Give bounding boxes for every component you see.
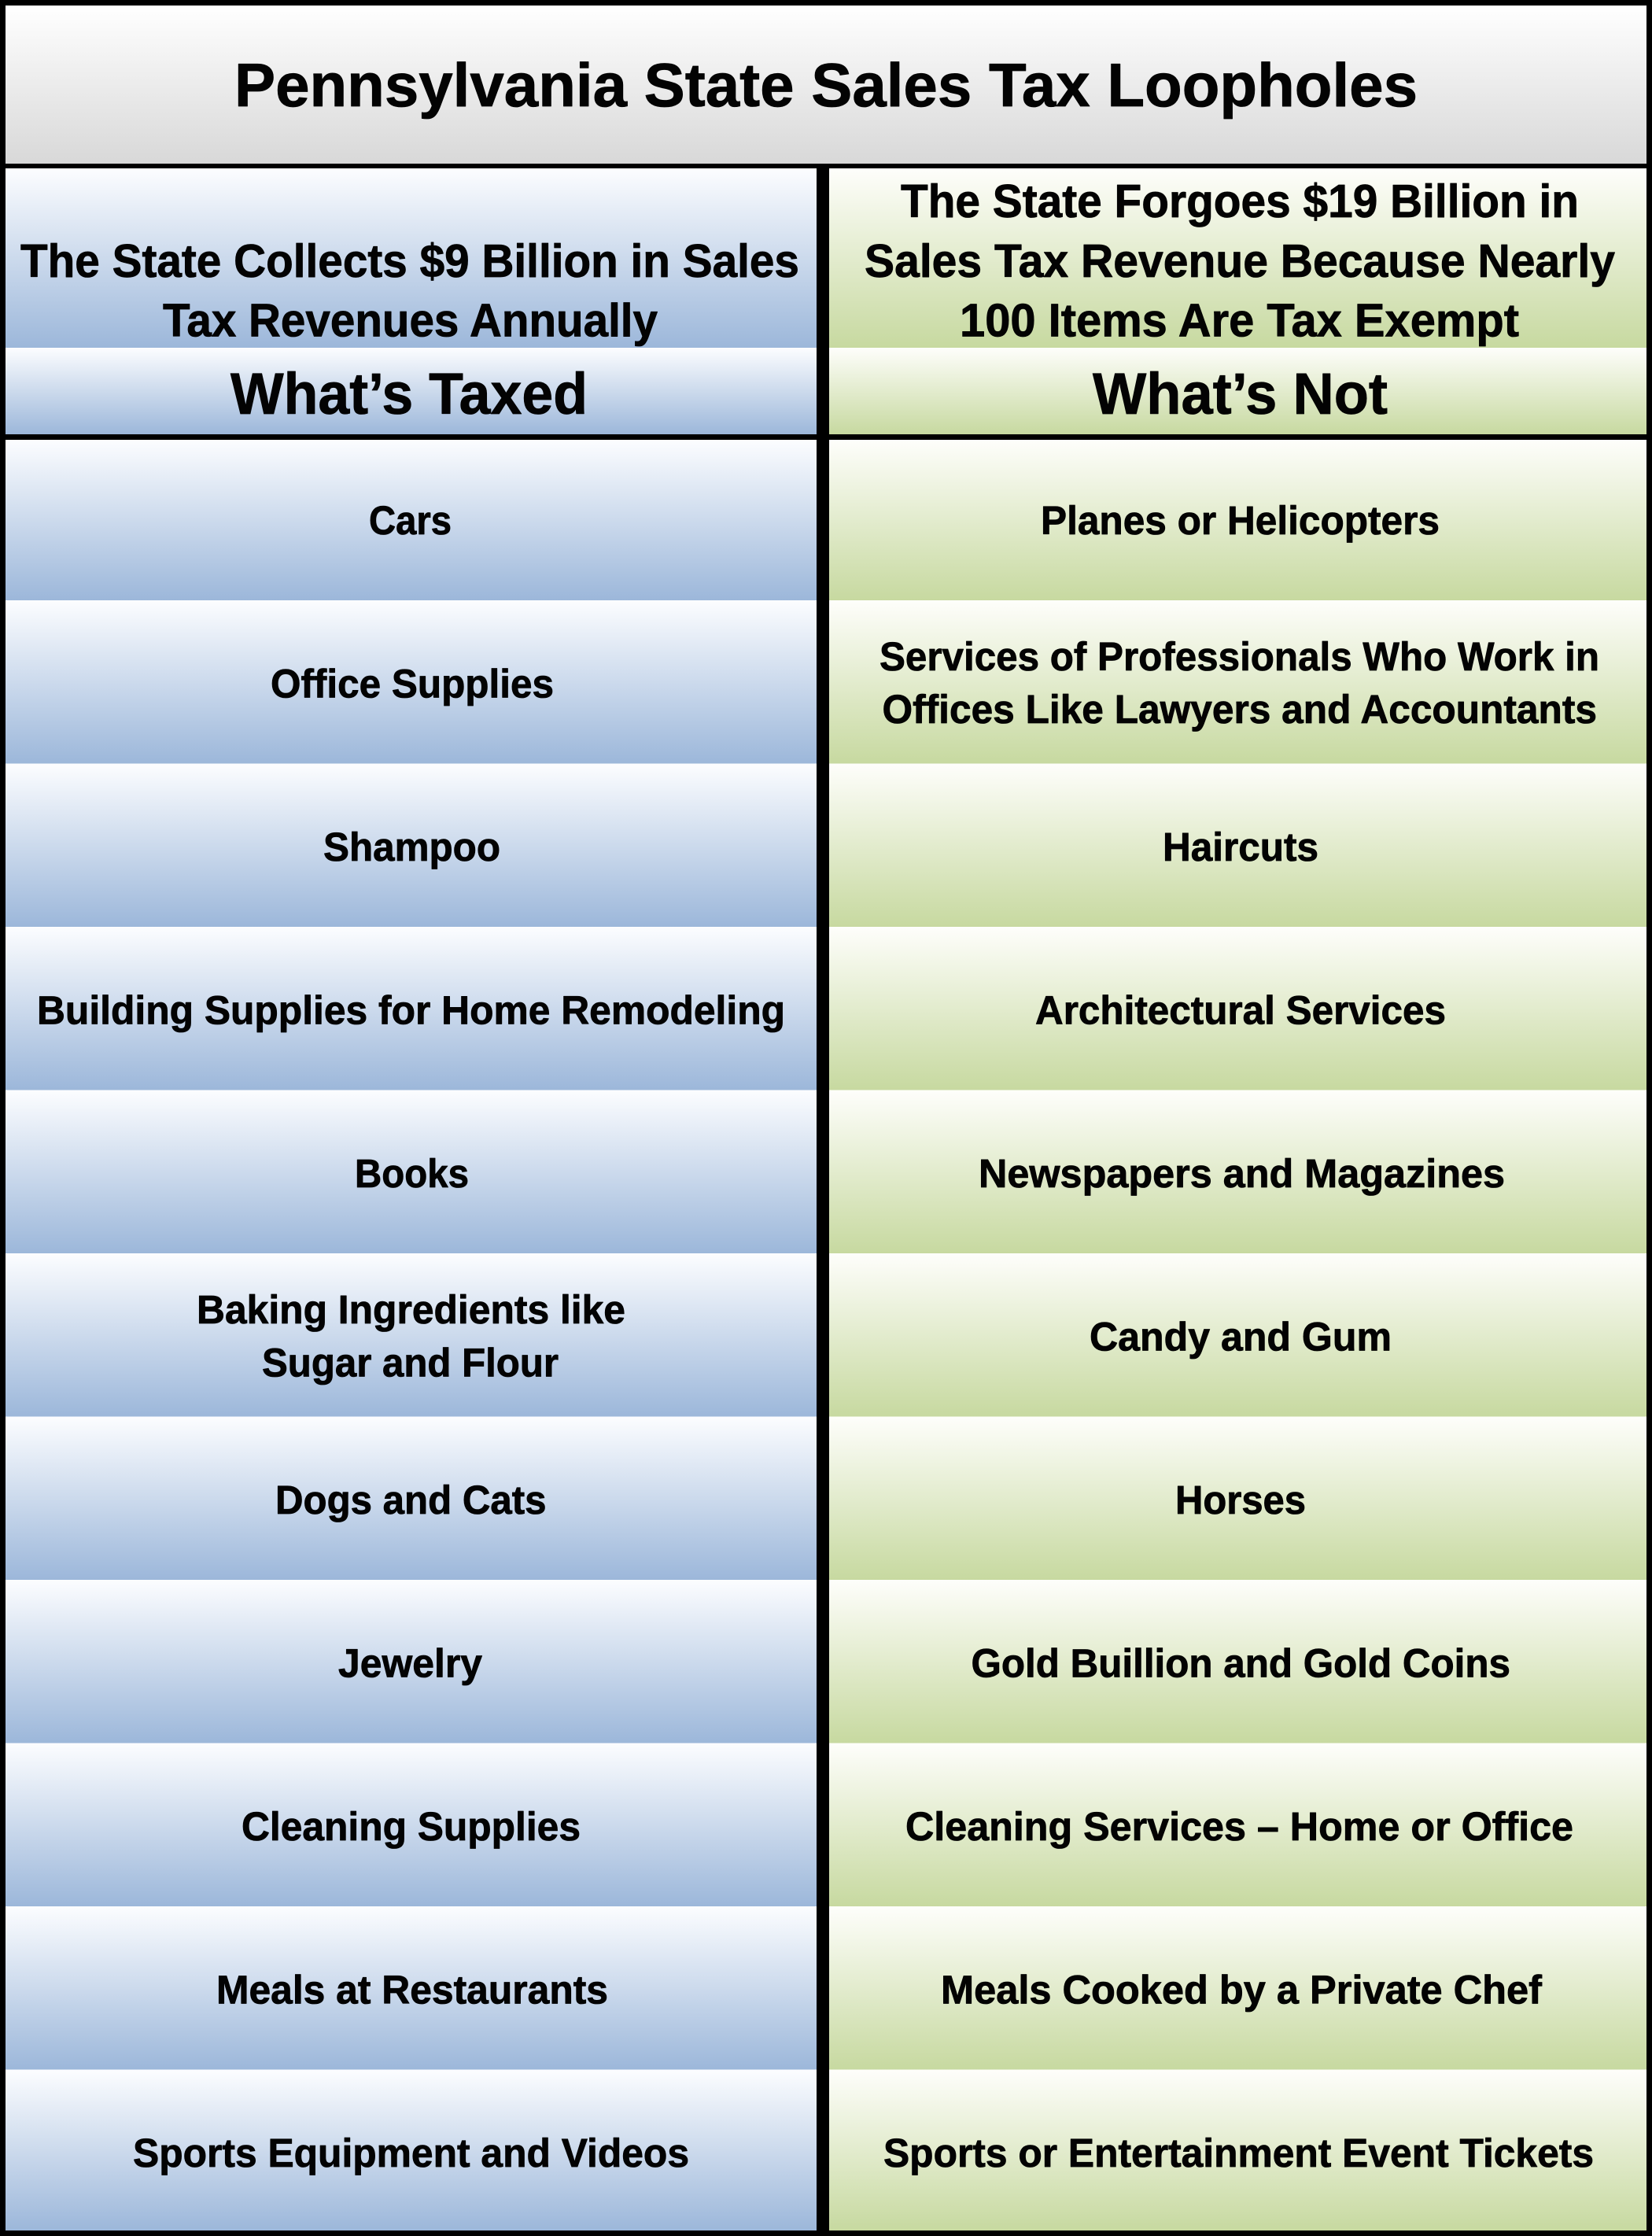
row 7 exempt: horses: Horses <box>1175 1478 1306 1522</box>
row 6 exempt: candy and gum: Candy and Gum <box>1090 1314 1392 1360</box>
row 4 taxed: building supplies <box>6 927 817 1090</box>
heading: what's taxed: What’s Taxed <box>230 361 588 426</box>
row 10 exempt: private chef <box>829 1906 1646 2069</box>
row 8 exempt: gold <box>829 1580 1646 1743</box>
title: Pennsylvania State Sales Tax Loopholes <box>234 50 1418 120</box>
row 7 exempt: horses <box>829 1416 1646 1580</box>
row 6 taxed: baking ingredients: Sugar and Flour <box>262 1341 559 1385</box>
row 3 taxed: shampoo <box>6 763 817 927</box>
row 4 taxed: building supplies: Building Supplies for Home Remodeling <box>37 988 785 1032</box>
panel: exempt summary <box>829 168 1646 348</box>
row 5 exempt: newspapers <box>829 1090 1646 1253</box>
row 11 exempt: event tickets <box>829 2069 1646 2230</box>
row 2 exempt: professional services: Services of Professionals Who Work in <box>879 634 1599 679</box>
panel: exempt summary: Sales Tax Revenue Because Nearly <box>865 235 1615 287</box>
panel: exempt summary: 100 Items Are Tax Exempt <box>960 294 1519 346</box>
panel: taxed summary: Tax Revenues Annually <box>163 294 658 346</box>
row 3 taxed: shampoo: Shampoo <box>323 825 500 869</box>
row 9 exempt: cleaning services <box>829 1743 1646 1906</box>
heading: what's not <box>829 348 1646 434</box>
row 8 exempt: gold: Gold Buillion and Gold Coins <box>971 1641 1510 1685</box>
row 1 exempt: planes <box>829 440 1646 600</box>
row 5 exempt: newspapers: Newspapers and Magazines <box>979 1151 1505 1196</box>
heading: what's taxed <box>6 348 817 434</box>
row 9 taxed: cleaning supplies <box>6 1743 817 1906</box>
row 4 exempt: architectural services: Architectural Services <box>1035 988 1446 1032</box>
row 7 taxed: dogs and cats: Dogs and Cats <box>275 1478 546 1522</box>
row 5 taxed: books <box>6 1090 817 1253</box>
row 1 taxed: cars <box>6 440 817 600</box>
row 10 taxed: restaurant meals <box>6 1906 817 2069</box>
row 11 exempt: event tickets: Sports or Entertainment Event Tickets <box>883 2131 1594 2175</box>
panel: exempt summary: The State Forgoes $19 Billion in <box>901 175 1579 227</box>
row 2 exempt: professional services <box>829 600 1646 763</box>
row 11 taxed: sports equipment <box>6 2069 817 2230</box>
row 3 exempt: haircuts <box>829 763 1646 927</box>
heading: what's not: What’s Not <box>1093 361 1388 426</box>
row 7 taxed: dogs and cats <box>6 1416 817 1580</box>
row 11 taxed: sports equipment: Sports Equipment and Videos <box>133 2131 689 2175</box>
row 9 taxed: cleaning supplies: Cleaning Supplies <box>242 1804 581 1849</box>
row 6 taxed: baking ingredients <box>6 1253 817 1416</box>
row 1 exempt: planes: Planes or Helicopters <box>1041 498 1440 543</box>
row 8 taxed: jewelry <box>6 1580 817 1743</box>
row 10 taxed: restaurant meals: Meals at Restaurants <box>216 1967 608 2013</box>
row 6 taxed: baking ingredients: Baking Ingredients like <box>197 1287 625 1332</box>
row 8 taxed: jewelry: Jewelry <box>338 1641 483 1685</box>
row 6 exempt: candy and gum <box>829 1253 1646 1416</box>
row 2 exempt: professional services: Offices Like Lawyers and Accountants <box>883 687 1597 732</box>
row 1 taxed: cars: Cars <box>369 498 452 543</box>
row 9 exempt: cleaning services: Cleaning Services – Home or Office <box>905 1804 1573 1849</box>
row 3 exempt: haircuts: Haircuts <box>1163 825 1318 869</box>
row 2 taxed: office supplies <box>6 600 817 763</box>
row 10 exempt: private chef: Meals Cooked by a Private Chef <box>941 1967 1543 2013</box>
title banner <box>6 6 1646 164</box>
row 2 taxed: office supplies: Office Supplies <box>271 661 554 707</box>
panel: taxed summary: The State Collects $9 Billion in Sales <box>20 235 799 287</box>
row 5 taxed: books: Books <box>355 1151 469 1196</box>
panel: taxed summary <box>6 168 817 348</box>
row 4 exempt: architectural services <box>829 927 1646 1090</box>
